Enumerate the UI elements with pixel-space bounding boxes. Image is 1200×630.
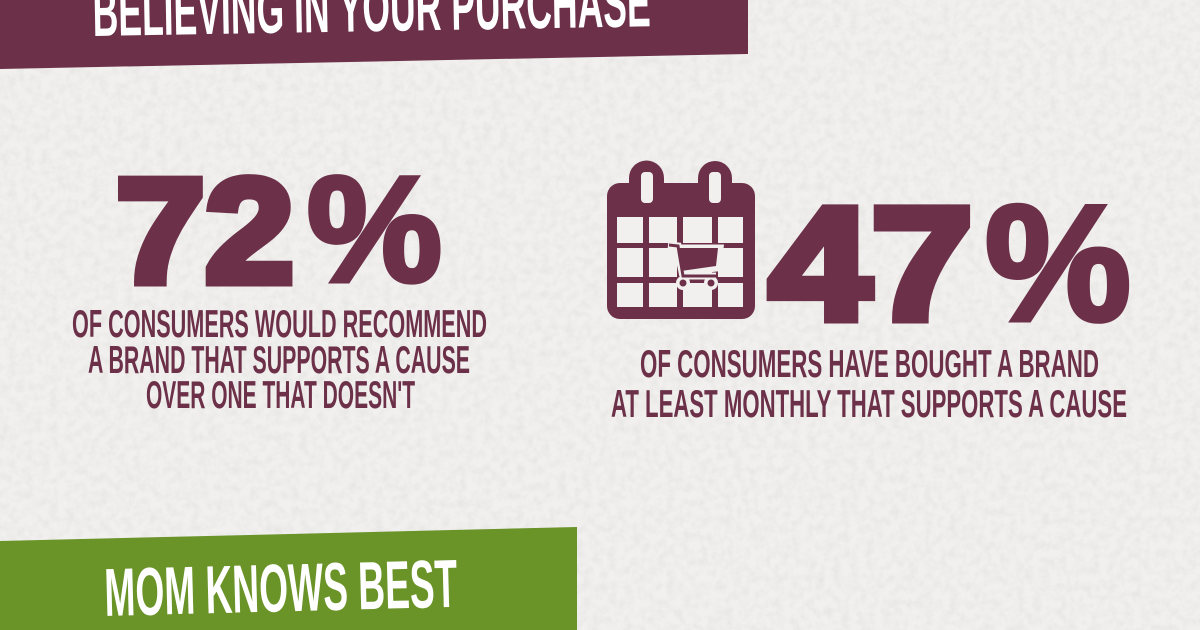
icon: calendar with shopping cart [607, 160, 755, 319]
caption for 47% [611, 343, 1127, 426]
stat: 72% [72, 145, 487, 417]
banner heading: MOM KNOWS BEST [103, 546, 458, 630]
banner: mom knows best [0, 527, 577, 630]
number 47% [769, 171, 1131, 355]
stat: 47% [611, 171, 1131, 426]
caption for 72%: OF CONSUMERS WOULD RECOMMEND [72, 303, 487, 346]
banner: believing in your purchase [0, 0, 748, 69]
caption for 72% [72, 303, 487, 417]
number 72% [116, 145, 442, 314]
number 47%: % [985, 171, 1131, 355]
number 72%: 72 [116, 149, 294, 314]
caption for 72%: A BRAND THAT SUPPORTS A CAUSE [88, 339, 470, 382]
number 47%: 47 [769, 174, 973, 353]
number 72%: % [307, 145, 442, 313]
caption for 72%: OVER ONE THAT DOESN'T [146, 374, 415, 417]
